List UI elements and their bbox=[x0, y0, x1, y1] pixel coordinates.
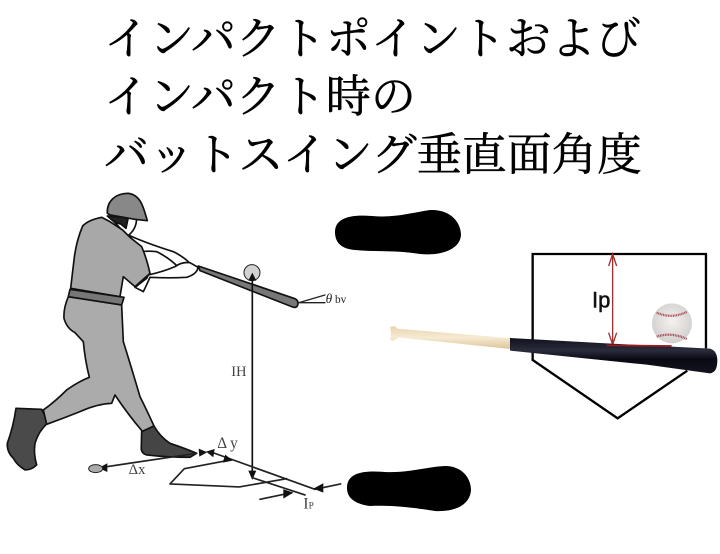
angle marker: θ bbox=[326, 291, 333, 306]
trousers bbox=[43, 297, 154, 432]
height line IH bbox=[231, 273, 256, 480]
bat barrel bbox=[510, 338, 717, 373]
second base marker bbox=[89, 465, 103, 473]
impact line bbox=[607, 343, 672, 348]
bat handle bbox=[390, 326, 511, 349]
ball bbox=[244, 265, 260, 281]
shoe print top bbox=[335, 210, 461, 254]
title: インパクト時の bbox=[104, 72, 416, 122]
face and hair bbox=[110, 215, 137, 237]
reference lines bbox=[99, 449, 341, 499]
near arm and hands bbox=[135, 262, 198, 292]
baseball bbox=[652, 303, 692, 343]
back shoe bbox=[7, 408, 47, 470]
title: インパクトポイントおよび bbox=[104, 14, 641, 64]
title bbox=[104, 14, 642, 180]
shoe print bottom bbox=[347, 466, 471, 511]
bat bbox=[198, 266, 298, 307]
delta x label: Δx bbox=[129, 462, 146, 478]
Ip arrow bbox=[609, 254, 617, 345]
title: バットスイング垂直面角度 bbox=[104, 130, 642, 180]
home plate outline bbox=[533, 254, 706, 418]
jersey bbox=[71, 217, 150, 297]
Ip label: IP bbox=[303, 495, 314, 512]
delta y label: Δ y bbox=[217, 435, 238, 452]
height line IH: IH bbox=[231, 364, 246, 380]
home plate bbox=[170, 461, 287, 487]
batter figure bbox=[7, 193, 198, 470]
Ip label: Ip bbox=[592, 287, 610, 312]
front shoe bbox=[141, 426, 197, 457]
helmet bbox=[107, 193, 147, 221]
angle marker bbox=[299, 291, 347, 306]
angle marker: bv bbox=[335, 294, 347, 306]
diagram: batter with measurements bbox=[7, 193, 347, 512]
belt bbox=[68, 289, 124, 305]
strike zone diagram bbox=[390, 254, 717, 418]
far arm bbox=[128, 235, 189, 267]
